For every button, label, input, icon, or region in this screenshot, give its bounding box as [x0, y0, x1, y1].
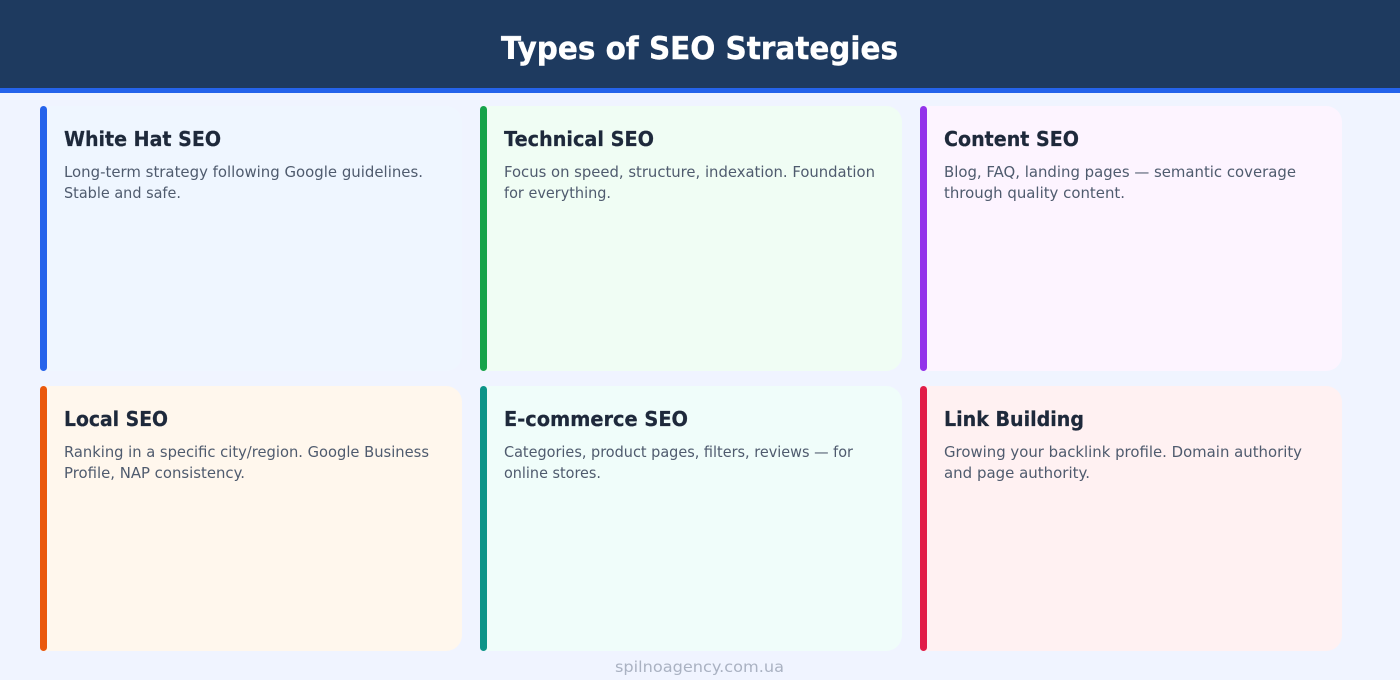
- accent bar: orange: [40, 386, 47, 651]
- accent bar: green: [480, 106, 487, 371]
- description: White Hat SEO: [64, 163, 423, 202]
- description: White Hat SEO: Stable and safe.: [64, 184, 181, 202]
- description: Technical SEO: Focus on speed, structure, indexation. Foundation: [504, 163, 875, 181]
- description: E-commerce SEO: Categories, product pages, filters, reviews — for: [504, 443, 854, 461]
- panel: Content SEO: [920, 106, 1342, 371]
- footer: source: spilnoagency.com.ua: [615, 658, 784, 676]
- heading: Technical SEO: Technical SEO: [504, 127, 654, 151]
- heading: E-commerce SEO: E-commerce SEO: [504, 407, 688, 431]
- description: Content SEO: Blog, FAQ, landing pages — semantic coverage: [944, 163, 1296, 181]
- accent bar: red: [920, 386, 927, 651]
- description: Link Building: [944, 443, 1302, 482]
- description: Local SEO: [64, 443, 429, 482]
- description: Local SEO: Profile, NAP consistency.: [64, 464, 245, 482]
- description: Local SEO: Ranking in a specific city/region. Google Business: [64, 443, 429, 461]
- panel: Local SEO: [40, 386, 462, 651]
- header banner: [0, 0, 1400, 93]
- description: Technical SEO: [504, 163, 875, 202]
- description: Content SEO: through quality content.: [944, 184, 1125, 202]
- accent bar: purple: [920, 106, 927, 371]
- heading: White Hat SEO: White Hat SEO: [64, 127, 221, 151]
- panel: E-commerce SEO: [480, 386, 902, 651]
- panel: Technical SEO: [480, 106, 902, 371]
- description: Technical SEO: for everything.: [504, 184, 611, 202]
- heading: Link Building: Link Building: [944, 407, 1084, 431]
- accent bar: teal: [480, 386, 487, 651]
- heading: Local SEO: Local SEO: [64, 407, 168, 431]
- accent bar: blue: [40, 106, 47, 371]
- description: E-commerce SEO: [504, 443, 854, 482]
- description: White Hat SEO: Long-term strategy following Google guidelines.: [64, 163, 423, 181]
- description: Link Building: and page authority.: [944, 464, 1090, 482]
- description: E-commerce SEO: online stores.: [504, 464, 601, 482]
- description: Content SEO: [944, 163, 1296, 202]
- heading: Content SEO: Content SEO: [944, 127, 1079, 151]
- panel: Link Building: [920, 386, 1342, 651]
- description: Link Building: Growing your backlink profile. Domain authority: [944, 443, 1302, 461]
- title: Types of SEO Strategies: [501, 31, 898, 67]
- panel: White Hat SEO: [40, 106, 462, 371]
